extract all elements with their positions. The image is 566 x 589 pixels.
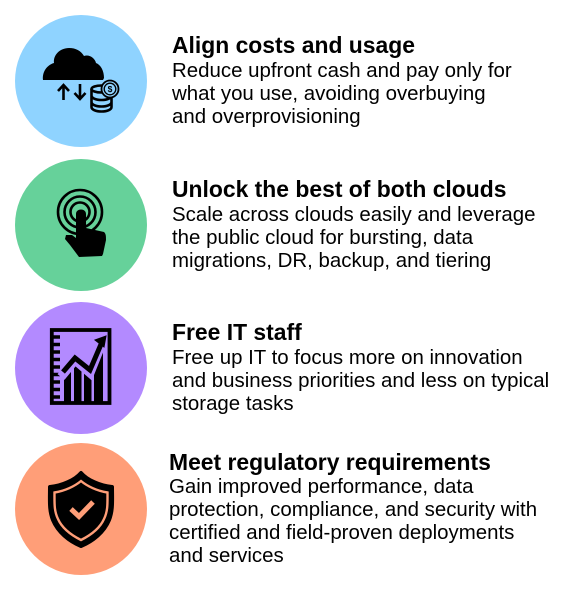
text block: migrations, DR, backup, and tiering bbox=[172, 249, 491, 272]
circle: purple bbox=[15, 302, 147, 434]
icon: growth chart bbox=[50, 328, 112, 405]
text block bbox=[172, 59, 512, 128]
icon: shield with check bbox=[48, 470, 114, 548]
text block: the public cloud for bursting, data bbox=[172, 226, 473, 249]
icon: cloud with arrows and coins bbox=[42, 48, 120, 113]
text block: what you use, avoiding overbuying bbox=[172, 82, 486, 105]
circle: green bbox=[15, 159, 147, 291]
text block: protection, compliance, and security with bbox=[169, 498, 537, 521]
heading: Meet regulatory requirements bbox=[169, 449, 491, 475]
text block bbox=[169, 475, 537, 567]
panel: meet regulatory requirements bbox=[15, 443, 537, 575]
heading: Free IT staff bbox=[172, 319, 302, 345]
text block: Gain improved performance, data bbox=[169, 475, 473, 498]
panel: free IT staff bbox=[15, 302, 549, 434]
icon: cloud with arrows and coins: $ bbox=[108, 84, 113, 94]
circle: blue bbox=[15, 15, 147, 147]
text block: and overprovisioning bbox=[172, 105, 361, 128]
text block: and business priorities and less on typical bbox=[172, 369, 549, 392]
text block: certified and field-proven deployments bbox=[169, 521, 514, 544]
heading: Unlock the best of both clouds bbox=[172, 176, 506, 202]
text block: storage tasks bbox=[172, 392, 294, 415]
text block: Reduce upfront cash and pay only for bbox=[172, 59, 512, 82]
heading: Align costs and usage bbox=[172, 32, 415, 58]
text block: Free up IT to focus more on innovation bbox=[172, 346, 523, 369]
text block: and services bbox=[169, 544, 284, 567]
panel: align costs and usage bbox=[15, 15, 512, 147]
text block: Scale across clouds easily and leverage bbox=[172, 203, 536, 226]
text block bbox=[172, 203, 536, 272]
icon: hand touching target bbox=[56, 188, 106, 257]
panel: unlock the best of both clouds bbox=[15, 159, 536, 291]
text block bbox=[172, 346, 549, 415]
circle: orange bbox=[15, 443, 147, 575]
